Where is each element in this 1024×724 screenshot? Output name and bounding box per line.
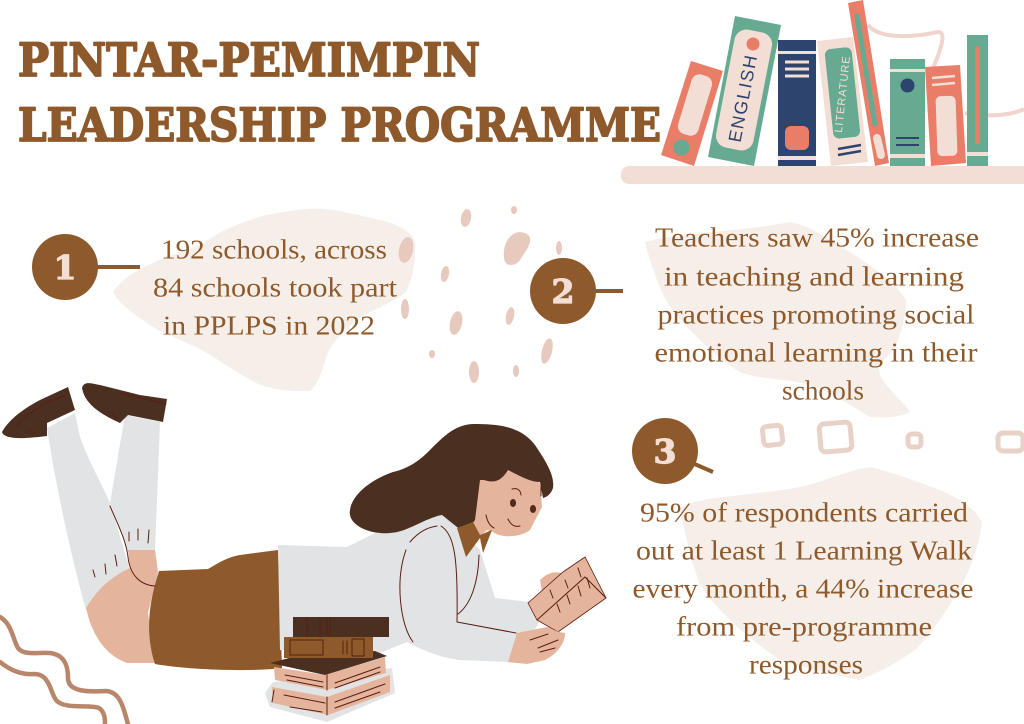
- illustration: girl reading: [2, 383, 606, 722]
- text: item 2: schools: [782, 374, 864, 406]
- text: item 3: every month, a 44% increase: [632, 572, 974, 604]
- face: [467, 470, 542, 538]
- illustration: bookshelf: [621, 0, 1024, 184]
- stack of books: [265, 617, 395, 722]
- skirt: [149, 550, 282, 670]
- text: item 2: in teaching and learning: [664, 260, 964, 292]
- illustration: bookshelf: LITERATURE: [833, 55, 853, 133]
- marker 1: [32, 234, 140, 300]
- leg details: [15, 393, 166, 586]
- title: LEADERSHIP PROGRAMME: [18, 98, 661, 152]
- hair: [350, 424, 553, 533]
- text: item 2: Teachers saw 45% increase: [655, 222, 979, 252]
- torso: [278, 515, 540, 663]
- text: item 2: emotional learning in their: [654, 336, 978, 368]
- text: item 3: responses: [749, 648, 863, 680]
- marker 3: [632, 418, 713, 484]
- text: item 3: from pre-programme: [676, 610, 932, 642]
- text: item 1: 84 schools took part: [153, 272, 397, 302]
- text: item 2: practices promoting social: [658, 298, 975, 330]
- decorative squares: [762, 422, 1023, 452]
- marker 1: 1: [54, 248, 76, 287]
- marker 2: 2: [552, 272, 574, 311]
- decorative wavy lines: [0, 617, 128, 724]
- decorative dots: [396, 206, 562, 383]
- text: item 2: [654, 222, 979, 406]
- legs: [47, 413, 160, 610]
- illustration: bookshelf: ENGLISH: [725, 52, 761, 144]
- marker 3: 3: [654, 432, 676, 471]
- text: item 1: in PPLPS in 2022: [163, 310, 375, 340]
- text: item 1: [153, 234, 397, 340]
- open book and hands: [508, 557, 606, 664]
- title: PINTAR-PEMIMPIN: [18, 33, 480, 87]
- panel: blob behind item 3: [680, 467, 982, 680]
- panel: blob behind item 2: [645, 222, 910, 417]
- marker 2: [530, 258, 623, 324]
- skin of thigh: [86, 550, 158, 663]
- text: item 3: 95% of respondents carried: [640, 496, 968, 528]
- panel: blob behind item 1: [113, 209, 415, 391]
- collar: [457, 522, 492, 557]
- facial details: [486, 484, 541, 528]
- shoes: [2, 383, 167, 438]
- text: item 3: out at least 1 Learning Walk: [636, 534, 972, 566]
- title: [18, 33, 661, 152]
- sleeve lines: [400, 526, 516, 642]
- text: item 3: [632, 496, 974, 680]
- text: item 1: 192 schools, across: [161, 234, 387, 264]
